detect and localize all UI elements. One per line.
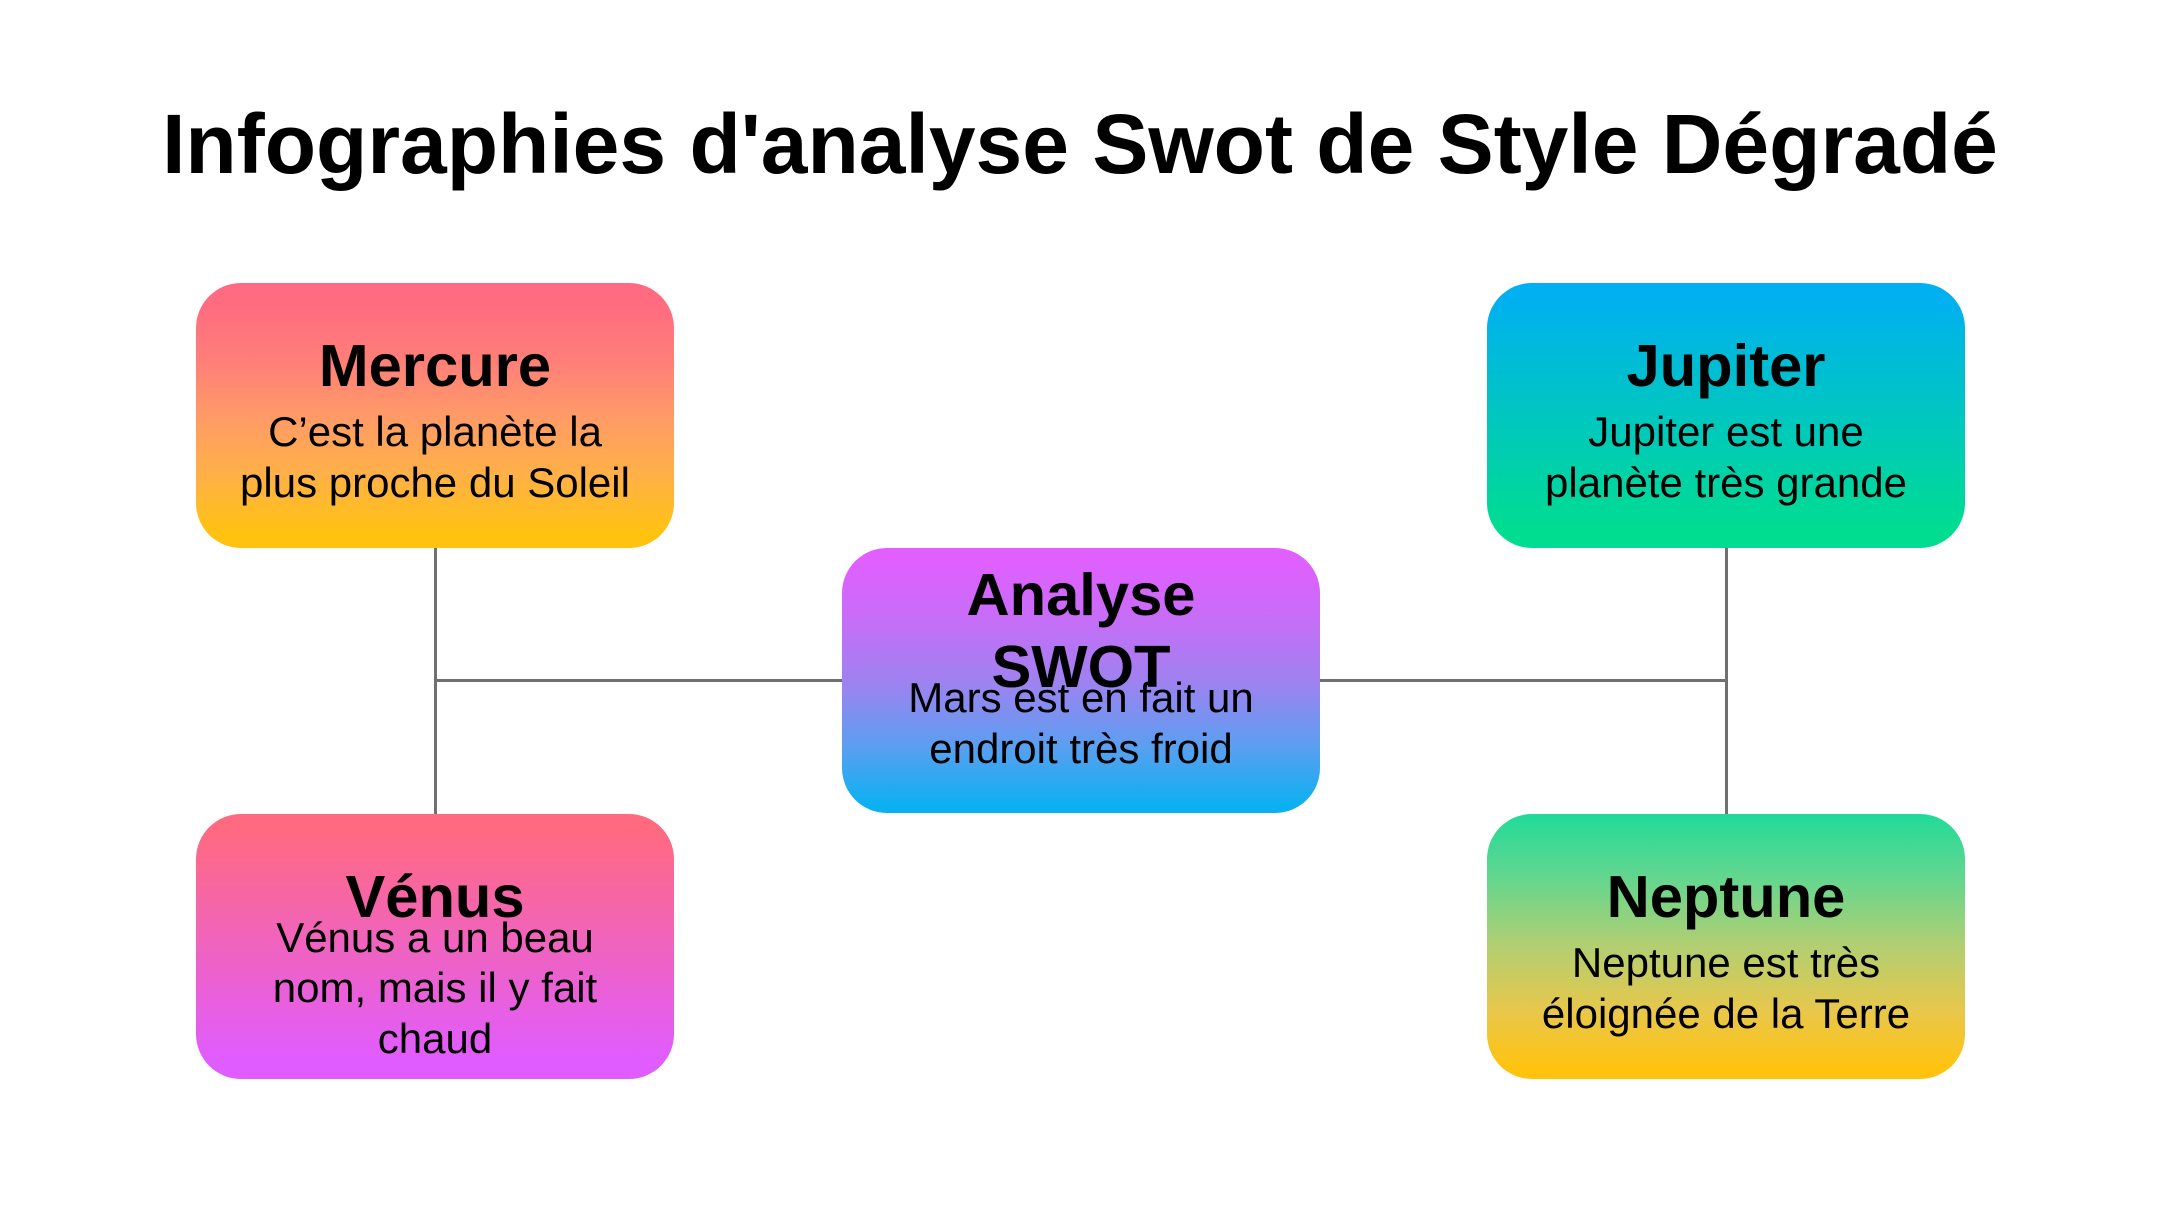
text: Vénus description: Vénus a un beau [276, 914, 594, 960]
panel: Analyse SWOT [842, 548, 1320, 813]
title: Infographies d'analyse Swot de Style Dégradé [162, 97, 1998, 191]
text: Neptune description: éloignée de la Terre [1542, 990, 1910, 1036]
text: Vénus description: nom, mais il y fait [273, 964, 597, 1011]
panel: Mercure [196, 282, 674, 548]
text: Vénus description: chaud [378, 1014, 492, 1062]
heading: Mercure: Mercure [319, 332, 551, 398]
text: Analyse SWOT description: endroit très froid [929, 724, 1233, 772]
text: Jupiter description: planète très grande [1545, 458, 1907, 506]
text: Neptune description: Neptune est très [1572, 939, 1880, 986]
connector lines [434, 548, 1728, 814]
text: Vénus description [273, 914, 597, 1062]
text: Mercure description: plus proche du Soleil [240, 458, 630, 506]
text: Analyse SWOT description [908, 674, 1254, 772]
heading: Analyse SWOT: Analyse [967, 561, 1195, 628]
text: Jupiter description [1545, 408, 1907, 506]
heading: Vénus: Vénus [345, 862, 525, 930]
panel: Jupiter [1487, 282, 1965, 548]
heading: Jupiter: Jupiter [1626, 332, 1826, 398]
heading: Analyse SWOT: SWOT [991, 633, 1171, 700]
panel: Vénus [196, 814, 674, 1079]
text: Jupiter description: Jupiter est une [1588, 408, 1864, 455]
text: Mercure description [240, 408, 630, 506]
text: Mercure description: C’est la planète la [268, 408, 602, 455]
heading: Neptune: Neptune [1607, 862, 1845, 930]
text: Neptune description [1542, 939, 1910, 1036]
heading: Analyse SWOT [967, 561, 1195, 700]
text: Analyse SWOT description: Mars est en fait un [908, 674, 1254, 721]
panel: Neptune [1487, 814, 1965, 1079]
